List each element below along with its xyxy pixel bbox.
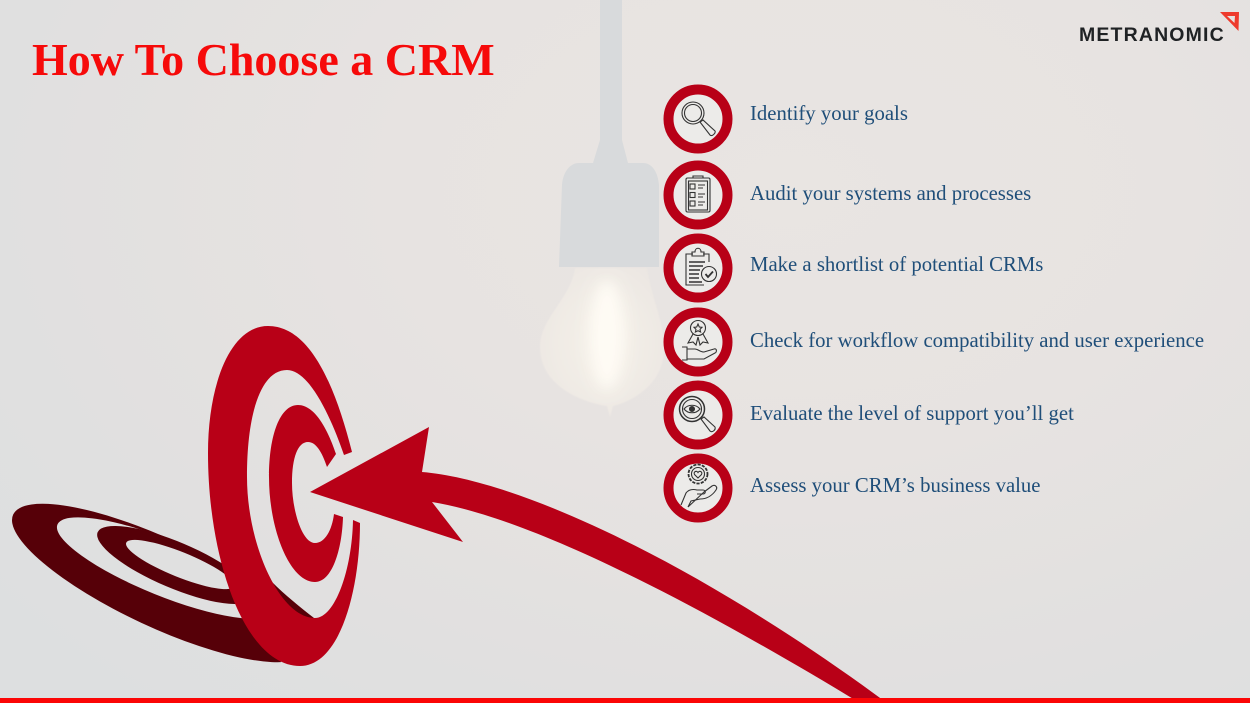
logo wordmark: METRANOMIC [1079,24,1225,46]
target shadow [12,504,282,662]
step label: Identify your goals [750,103,908,125]
icon: magnifier with eye [664,380,732,450]
title: How To Choose a CRM [32,34,495,85]
step 1 [664,84,908,154]
icon: magnifying glass [664,84,732,154]
step 5 [664,380,1074,450]
arrow hitting the target [310,427,887,703]
step label: Check for workflow compatibility and user experience [750,330,1204,352]
logo: Metranomic [1079,12,1239,46]
icon: clipboard with check [664,234,732,302]
logo triangle mark [1220,12,1239,31]
step label: Make a shortlist of potential CRMs [750,254,1043,276]
step label: Assess your CRM’s business value [750,475,1041,497]
illustration: light bulb, target and arrow [12,0,880,698]
icon: award ribbon over hand [664,308,732,376]
icon: checklist board [664,160,732,230]
step label: Evaluate the level of support you’ll get [750,403,1074,425]
bottom red bar [0,698,1250,703]
target shadow sliver inside the ring [272,582,314,618]
step 4 [664,308,1204,376]
step 6 [664,454,1041,522]
step 2 [664,160,1031,230]
step label: Audit your systems and processes [750,183,1031,205]
step 3 [664,234,1043,302]
light bulb [540,0,664,417]
target front rings [208,326,360,666]
icon: hand holding gear with heart [664,454,732,522]
